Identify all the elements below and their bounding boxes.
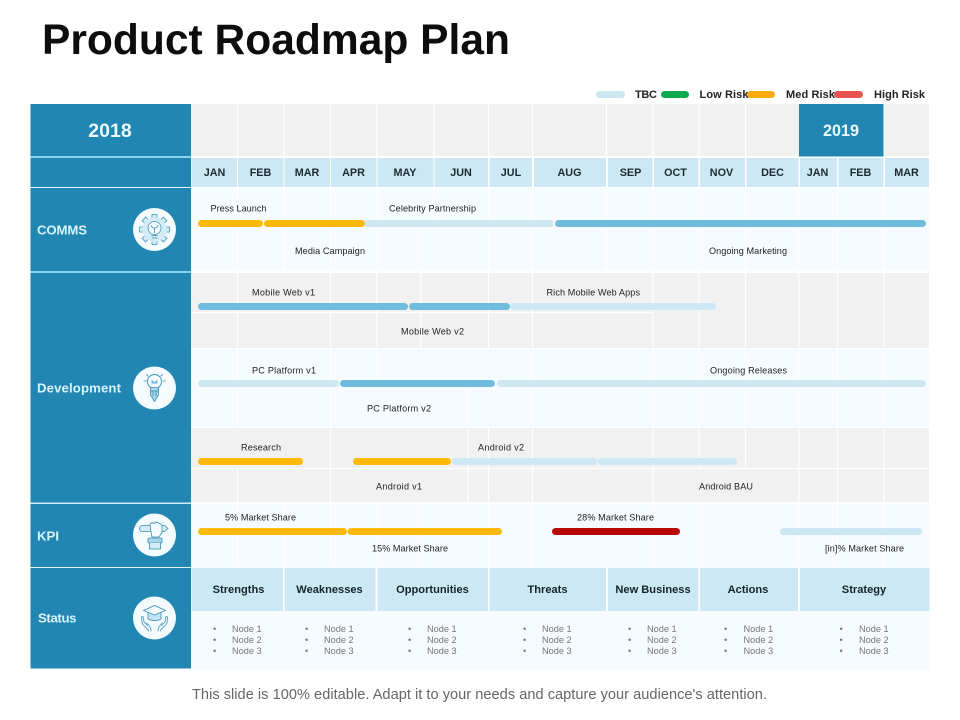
android labels: Android v1 — [376, 482, 422, 492]
year 2019 box — [799, 104, 884, 156]
legend item: Low Risk: Low Risk — [700, 89, 749, 101]
month header row: OCT — [664, 167, 687, 179]
status nodes: Strategy: • — [840, 635, 843, 645]
month header row: APR — [342, 167, 365, 179]
status nodes: Actions: • — [724, 624, 727, 634]
status headers: Threats — [527, 584, 568, 596]
legend — [596, 89, 926, 101]
year 2019 box: 2019 — [823, 122, 859, 140]
KPI labels: [in]% Market Share — [825, 544, 904, 554]
status nodes: Strengths: Node 1 — [232, 624, 262, 634]
icon: hand holding pencil — [133, 514, 176, 556]
android labels — [241, 442, 753, 492]
status headers: Actions — [728, 584, 768, 596]
status nodes: New Business: Node 2 — [647, 635, 677, 645]
icon: light bulb with pencil — [133, 366, 176, 410]
month header row: MAY — [393, 167, 417, 179]
icon: gear with light bulb — [133, 208, 176, 251]
legend item: Low Risk — [661, 89, 749, 101]
status nodes: Opportunities: Node 1 — [427, 624, 457, 634]
legend item: High Risk: High Risk — [874, 89, 926, 101]
month header row: MAR — [295, 167, 319, 179]
status nodes: Strengths: • — [213, 646, 216, 656]
status nodes: New Business: • — [628, 646, 631, 656]
KPI labels: 5% Market Share — [225, 512, 296, 522]
status headers: Weaknesses — [296, 584, 363, 596]
month header row: NOV — [710, 167, 734, 179]
status headers: Opportunities — [396, 584, 469, 596]
month header row: FEB — [250, 167, 271, 179]
status nodes: Opportunities — [408, 624, 457, 656]
KPI labels — [225, 512, 904, 554]
status headers: New Business — [615, 584, 691, 596]
section label: COMMS: COMMS — [37, 222, 87, 238]
status headers: Strengths — [213, 584, 264, 596]
footer note: This slide is 100% editable. Adapt it to your needs and capture your audience's attention. — [192, 687, 767, 703]
status nodes: New Business: • — [628, 624, 631, 634]
status nodes: Weaknesses: Node 2 — [324, 635, 354, 645]
status nodes: Strategy: Node 2 — [859, 635, 889, 645]
comms labels: Press Launch — [210, 204, 266, 214]
status nodes: Strategy: • — [840, 646, 843, 656]
android bars — [198, 458, 737, 465]
mobile web labels: Mobile Web v1 — [252, 288, 315, 298]
status nodes: Strategy: Node 3 — [859, 646, 889, 656]
PC platform labels: Ongoing Releases — [710, 366, 787, 376]
KPI bars — [198, 528, 922, 535]
month header row: JAN — [807, 167, 828, 179]
status nodes: Threats: Node 3 — [542, 646, 572, 656]
title: Product Roadmap Plan — [42, 17, 510, 64]
status nodes: Actions — [724, 624, 773, 656]
KPI labels: 28% Market Share — [577, 512, 654, 522]
status nodes: New Business: Node 3 — [647, 646, 677, 656]
month header row: AUG — [558, 167, 582, 179]
android labels: Android v2 — [478, 442, 524, 452]
status nodes: Threats: • — [523, 624, 526, 634]
status nodes: Actions: • — [724, 635, 727, 645]
section label: Status: Status — [38, 610, 76, 626]
mobile web bars — [198, 303, 716, 310]
status headers — [192, 568, 930, 611]
PC platform bars — [198, 380, 926, 387]
status nodes: Weaknesses: Node 3 — [324, 646, 354, 656]
mobile web labels: Rich Mobile Web Apps — [546, 288, 640, 298]
legend item: High Risk — [834, 89, 926, 101]
comms labels: Media Campaign — [295, 246, 365, 256]
status nodes: Opportunities: Node 2 — [427, 635, 457, 645]
status nodes: Strategy: • — [840, 624, 843, 634]
status nodes: Strengths: Node 2 — [232, 635, 262, 645]
PC platform labels — [252, 366, 787, 414]
status nodes: Opportunities: • — [408, 624, 411, 634]
month header row: JUN — [450, 167, 472, 179]
month header row — [192, 158, 929, 187]
mobile web labels: Mobile Web v2 — [401, 326, 464, 336]
status nodes: Opportunities: • — [408, 646, 411, 656]
month header row: JUL — [501, 167, 522, 179]
android labels: Research — [241, 442, 281, 452]
PC platform labels: PC Platform v2 — [367, 404, 431, 414]
month header row: JAN — [204, 167, 225, 179]
status nodes: Strategy — [840, 624, 889, 656]
status headers: Strategy — [842, 584, 887, 596]
status nodes: Threats: Node 2 — [542, 635, 572, 645]
status nodes: Strengths: • — [213, 624, 216, 634]
status nodes: Strengths: • — [213, 635, 216, 645]
status nodes: Strategy: Node 1 — [859, 624, 889, 634]
row backgrounds — [191, 104, 929, 671]
status nodes: Strengths — [213, 624, 262, 656]
section label: Development: Development — [37, 380, 122, 396]
android labels: Android BAU — [699, 482, 753, 492]
comms timeline bars — [198, 220, 926, 227]
KPI labels: 15% Market Share — [372, 544, 448, 554]
status nodes: Actions: Node 1 — [744, 624, 773, 634]
status nodes: Opportunities: • — [408, 635, 411, 645]
status nodes: Threats: • — [523, 646, 526, 656]
left column panel — [30, 104, 191, 668]
year 2018: 2018 — [88, 120, 132, 142]
month header row: MAR — [894, 167, 919, 179]
month header row: DEC — [761, 167, 784, 179]
mobile web labels — [252, 288, 640, 336]
status nodes: Weaknesses: Node 1 — [324, 624, 354, 634]
status nodes: Weaknesses: • — [305, 646, 308, 656]
legend item: TBC — [596, 89, 657, 101]
status nodes: Opportunities: Node 3 — [427, 646, 457, 656]
status nodes: Actions: • — [724, 646, 727, 656]
status nodes: New Business: Node 1 — [647, 624, 677, 634]
icon: graduation cap held by hands — [133, 596, 176, 640]
status nodes: New Business — [628, 624, 677, 656]
status nodes: Threats: • — [523, 635, 526, 645]
comms labels: Ongoing Marketing — [709, 246, 787, 256]
status nodes: Weaknesses — [305, 624, 354, 656]
comms labels — [210, 204, 787, 256]
month header row: FEB — [850, 167, 871, 179]
month header row: SEP — [620, 167, 641, 179]
status nodes: Weaknesses: • — [305, 635, 308, 645]
status nodes: Actions: Node 2 — [744, 635, 773, 645]
comms labels: Celebrity Partnership — [389, 204, 476, 214]
status nodes: Threats: Node 1 — [542, 624, 572, 634]
status nodes: New Business: • — [628, 635, 631, 645]
status nodes: Threats — [523, 624, 572, 656]
status nodes: Strengths: Node 3 — [232, 646, 262, 656]
legend item: TBC: TBC — [635, 89, 657, 101]
status nodes: Actions: Node 3 — [744, 646, 773, 656]
PC platform labels: PC Platform v1 — [252, 366, 316, 376]
status nodes: Weaknesses: • — [305, 624, 308, 634]
legend item: Med Risk — [747, 89, 836, 101]
section label: KPI: KPI — [37, 528, 59, 544]
legend item: Med Risk: Med Risk — [786, 89, 836, 101]
